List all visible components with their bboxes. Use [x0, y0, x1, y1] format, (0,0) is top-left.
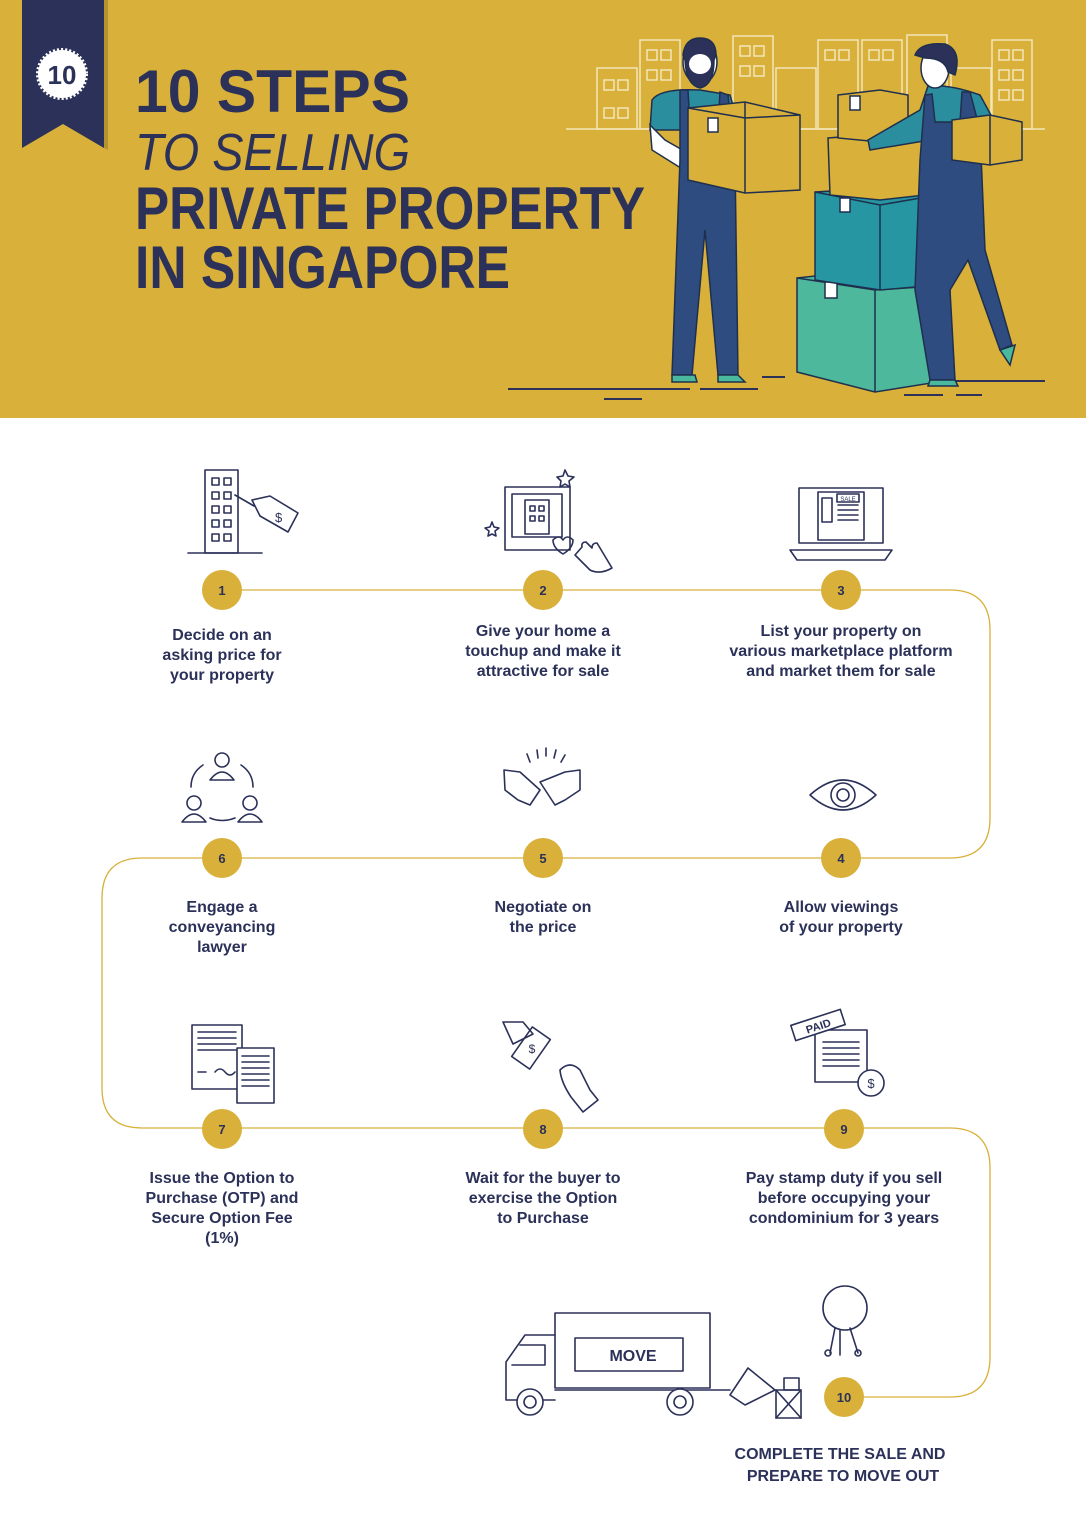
step 6: 6 — [218, 851, 226, 866]
step 1: 1 — [218, 583, 226, 598]
step 2: 2 — [539, 583, 547, 598]
illustration: buildings and movers — [508, 35, 1045, 399]
title — [135, 58, 645, 301]
step 1: Decide on an — [172, 627, 272, 644]
step 8: to Purchase — [497, 1210, 589, 1227]
step 9: condominium for 3 years — [749, 1210, 939, 1227]
step 10: COMPLETE THE SALE AND — [735, 1446, 945, 1463]
step 7: Secure Option Fee — [151, 1210, 293, 1227]
icon: paid document with coin: $ — [867, 1076, 875, 1091]
step 1: your property — [170, 667, 274, 684]
step 5: the price — [510, 919, 576, 936]
icon: documents — [192, 1025, 274, 1103]
step 3: various marketplace platform — [729, 643, 953, 660]
step 8: exercise the Option — [469, 1190, 617, 1207]
step 4 — [779, 780, 903, 936]
icon: building with price tag — [188, 470, 298, 553]
step 9: Pay stamp duty if you sell — [746, 1170, 942, 1187]
step 6: Engage a — [186, 899, 258, 916]
step 1 — [162, 470, 298, 684]
step 4: of your property — [779, 919, 903, 936]
ribbon badge — [22, 0, 108, 150]
step 5: Negotiate on — [495, 899, 591, 916]
icon: home picture with stars and hand — [485, 470, 612, 572]
step 2: touchup and make it — [465, 643, 621, 660]
header band — [0, 0, 1086, 418]
icon: people cycle — [182, 753, 262, 822]
icon: hand giving money: $ — [529, 1042, 536, 1056]
step 2: attractive for sale — [477, 663, 609, 680]
step 6 — [169, 753, 275, 956]
icon: eye — [810, 780, 876, 810]
man 1 — [650, 38, 800, 382]
ground lines — [508, 377, 1045, 399]
icon: handshake — [504, 748, 580, 805]
step 6: conveyancing — [169, 919, 275, 936]
ribbon badge: 10 — [48, 60, 76, 90]
title: TO SELLING — [135, 124, 410, 182]
step 3: 3 — [837, 583, 845, 598]
icon: moving truck: MOVE — [609, 1348, 657, 1365]
step 4: Allow viewings — [784, 899, 898, 916]
title: IN SINGAPORE — [135, 234, 510, 301]
step 8: 8 — [539, 1122, 547, 1137]
step 3: and market them for sale — [746, 663, 936, 680]
title: 10 STEPS — [135, 58, 410, 125]
step 7: Purchase (OTP) and — [146, 1190, 298, 1207]
step 1: asking price for — [162, 647, 282, 664]
path connector — [102, 590, 990, 1397]
icon: paid document with coin — [791, 1009, 884, 1096]
icon: moving truck — [506, 1313, 801, 1418]
mover 2 — [868, 44, 1022, 386]
step 9: 9 — [840, 1122, 848, 1137]
step 9: before occupying your — [758, 1190, 930, 1207]
icon: keys — [823, 1286, 867, 1356]
box stack — [797, 90, 950, 392]
step 8: Wait for the buyer to — [466, 1170, 621, 1187]
step 7: (1%) — [205, 1230, 239, 1247]
step 2: Give your home a — [476, 623, 610, 640]
icon: laptop with listing — [790, 488, 892, 560]
icon: paid document with coin: PAID — [805, 1017, 833, 1037]
icon: laptop with listing: SALE — [840, 497, 856, 503]
step 10: PREPARE TO MOVE OUT — [747, 1468, 939, 1485]
step 4: 4 — [837, 851, 845, 866]
step 7: 7 — [218, 1122, 226, 1137]
step 3: List your property on — [761, 623, 921, 640]
step 7: Issue the Option to — [150, 1170, 295, 1187]
step 7 — [146, 1025, 298, 1247]
icon: hand giving money — [503, 1022, 598, 1112]
step 3 — [729, 488, 953, 680]
step 2 — [465, 470, 621, 680]
icon: building with price tag: $ — [275, 510, 283, 525]
step 10: 10 — [837, 1390, 851, 1405]
step 8 — [466, 1022, 621, 1227]
step 9 — [746, 1009, 942, 1227]
title: PRIVATE PROPERTY — [135, 175, 645, 242]
step 5 — [495, 748, 591, 936]
step 6: lawyer — [197, 939, 247, 956]
step 5: 5 — [539, 851, 547, 866]
step 10 — [506, 1286, 945, 1485]
